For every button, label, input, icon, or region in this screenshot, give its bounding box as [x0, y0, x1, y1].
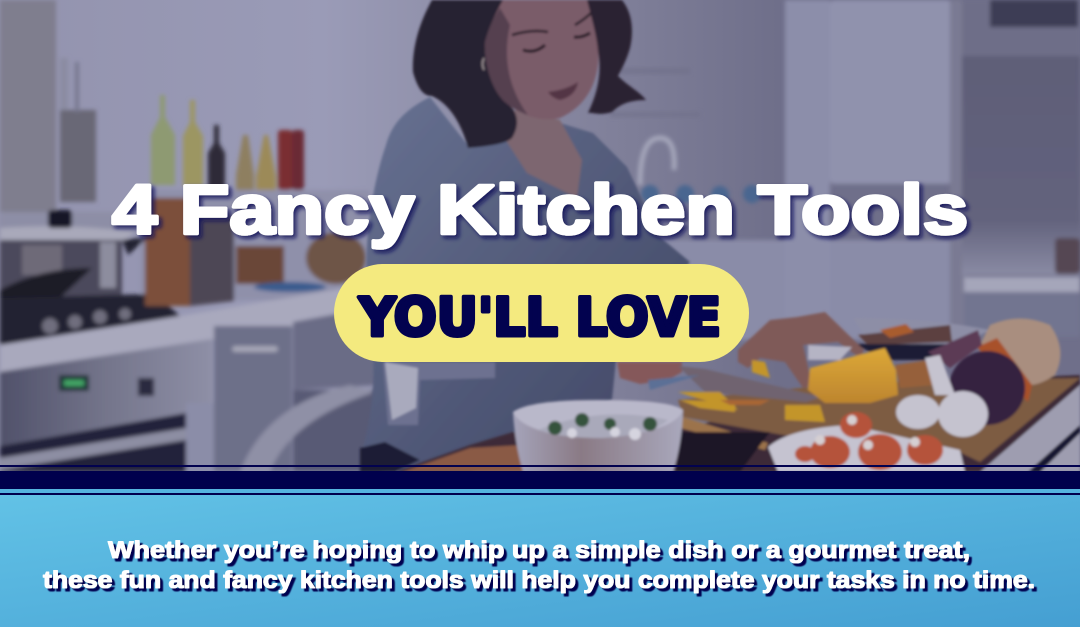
table — [395, 375, 1080, 472]
cabinets — [214, 326, 292, 472]
jeans — [360, 442, 420, 472]
kitchen photo background — [0, 0, 1080, 472]
panel: intro background — [0, 493, 1080, 627]
steadying hand — [738, 312, 864, 388]
bottles — [151, 95, 304, 193]
utensil canister — [60, 58, 96, 202]
thin navy rule — [0, 465, 1080, 467]
blue accent line — [0, 489, 1080, 493]
navy band — [0, 471, 1080, 489]
eggplant — [949, 351, 1025, 425]
torso and shoulders — [360, 97, 690, 472]
sleeve cuff — [383, 362, 495, 425]
title: 4 Fancy Kitchen Tools — [112, 170, 968, 248]
plate in background — [853, 318, 990, 350]
neck and chest — [503, 110, 582, 198]
yellow pepper — [808, 348, 898, 403]
table and food — [395, 312, 1080, 472]
onion slices — [808, 345, 852, 360]
subtitle pill: you'll love: YOU'LL LOVE — [358, 288, 721, 348]
face — [485, 0, 598, 119]
red onion — [928, 330, 982, 368]
intro text — [43, 537, 1035, 594]
garlic — [896, 355, 988, 437]
back walls right — [660, 240, 965, 340]
intro text: Whether you’re hoping to whip up a simple dish or a gourmet treat, — [108, 537, 970, 564]
hair — [413, 0, 517, 148]
oven — [0, 339, 212, 446]
pepper strips — [678, 360, 825, 422]
squash — [980, 318, 1060, 385]
stove — [0, 294, 180, 345]
subtitle pill: you'll love — [334, 264, 749, 362]
counter backsplash — [140, 190, 370, 300]
countertop — [0, 288, 372, 372]
chopping hand with knife — [617, 362, 682, 384]
woman — [360, 0, 690, 472]
left wall block — [0, 0, 56, 212]
knife block — [145, 198, 190, 306]
faucet and shelves — [640, 138, 674, 185]
pot — [0, 210, 148, 300]
intro text: these fun and fancy kitchen tools will help you complete your tasks in no time. — [43, 567, 1035, 594]
tomato bowl — [768, 425, 965, 472]
white bowl — [513, 400, 683, 472]
